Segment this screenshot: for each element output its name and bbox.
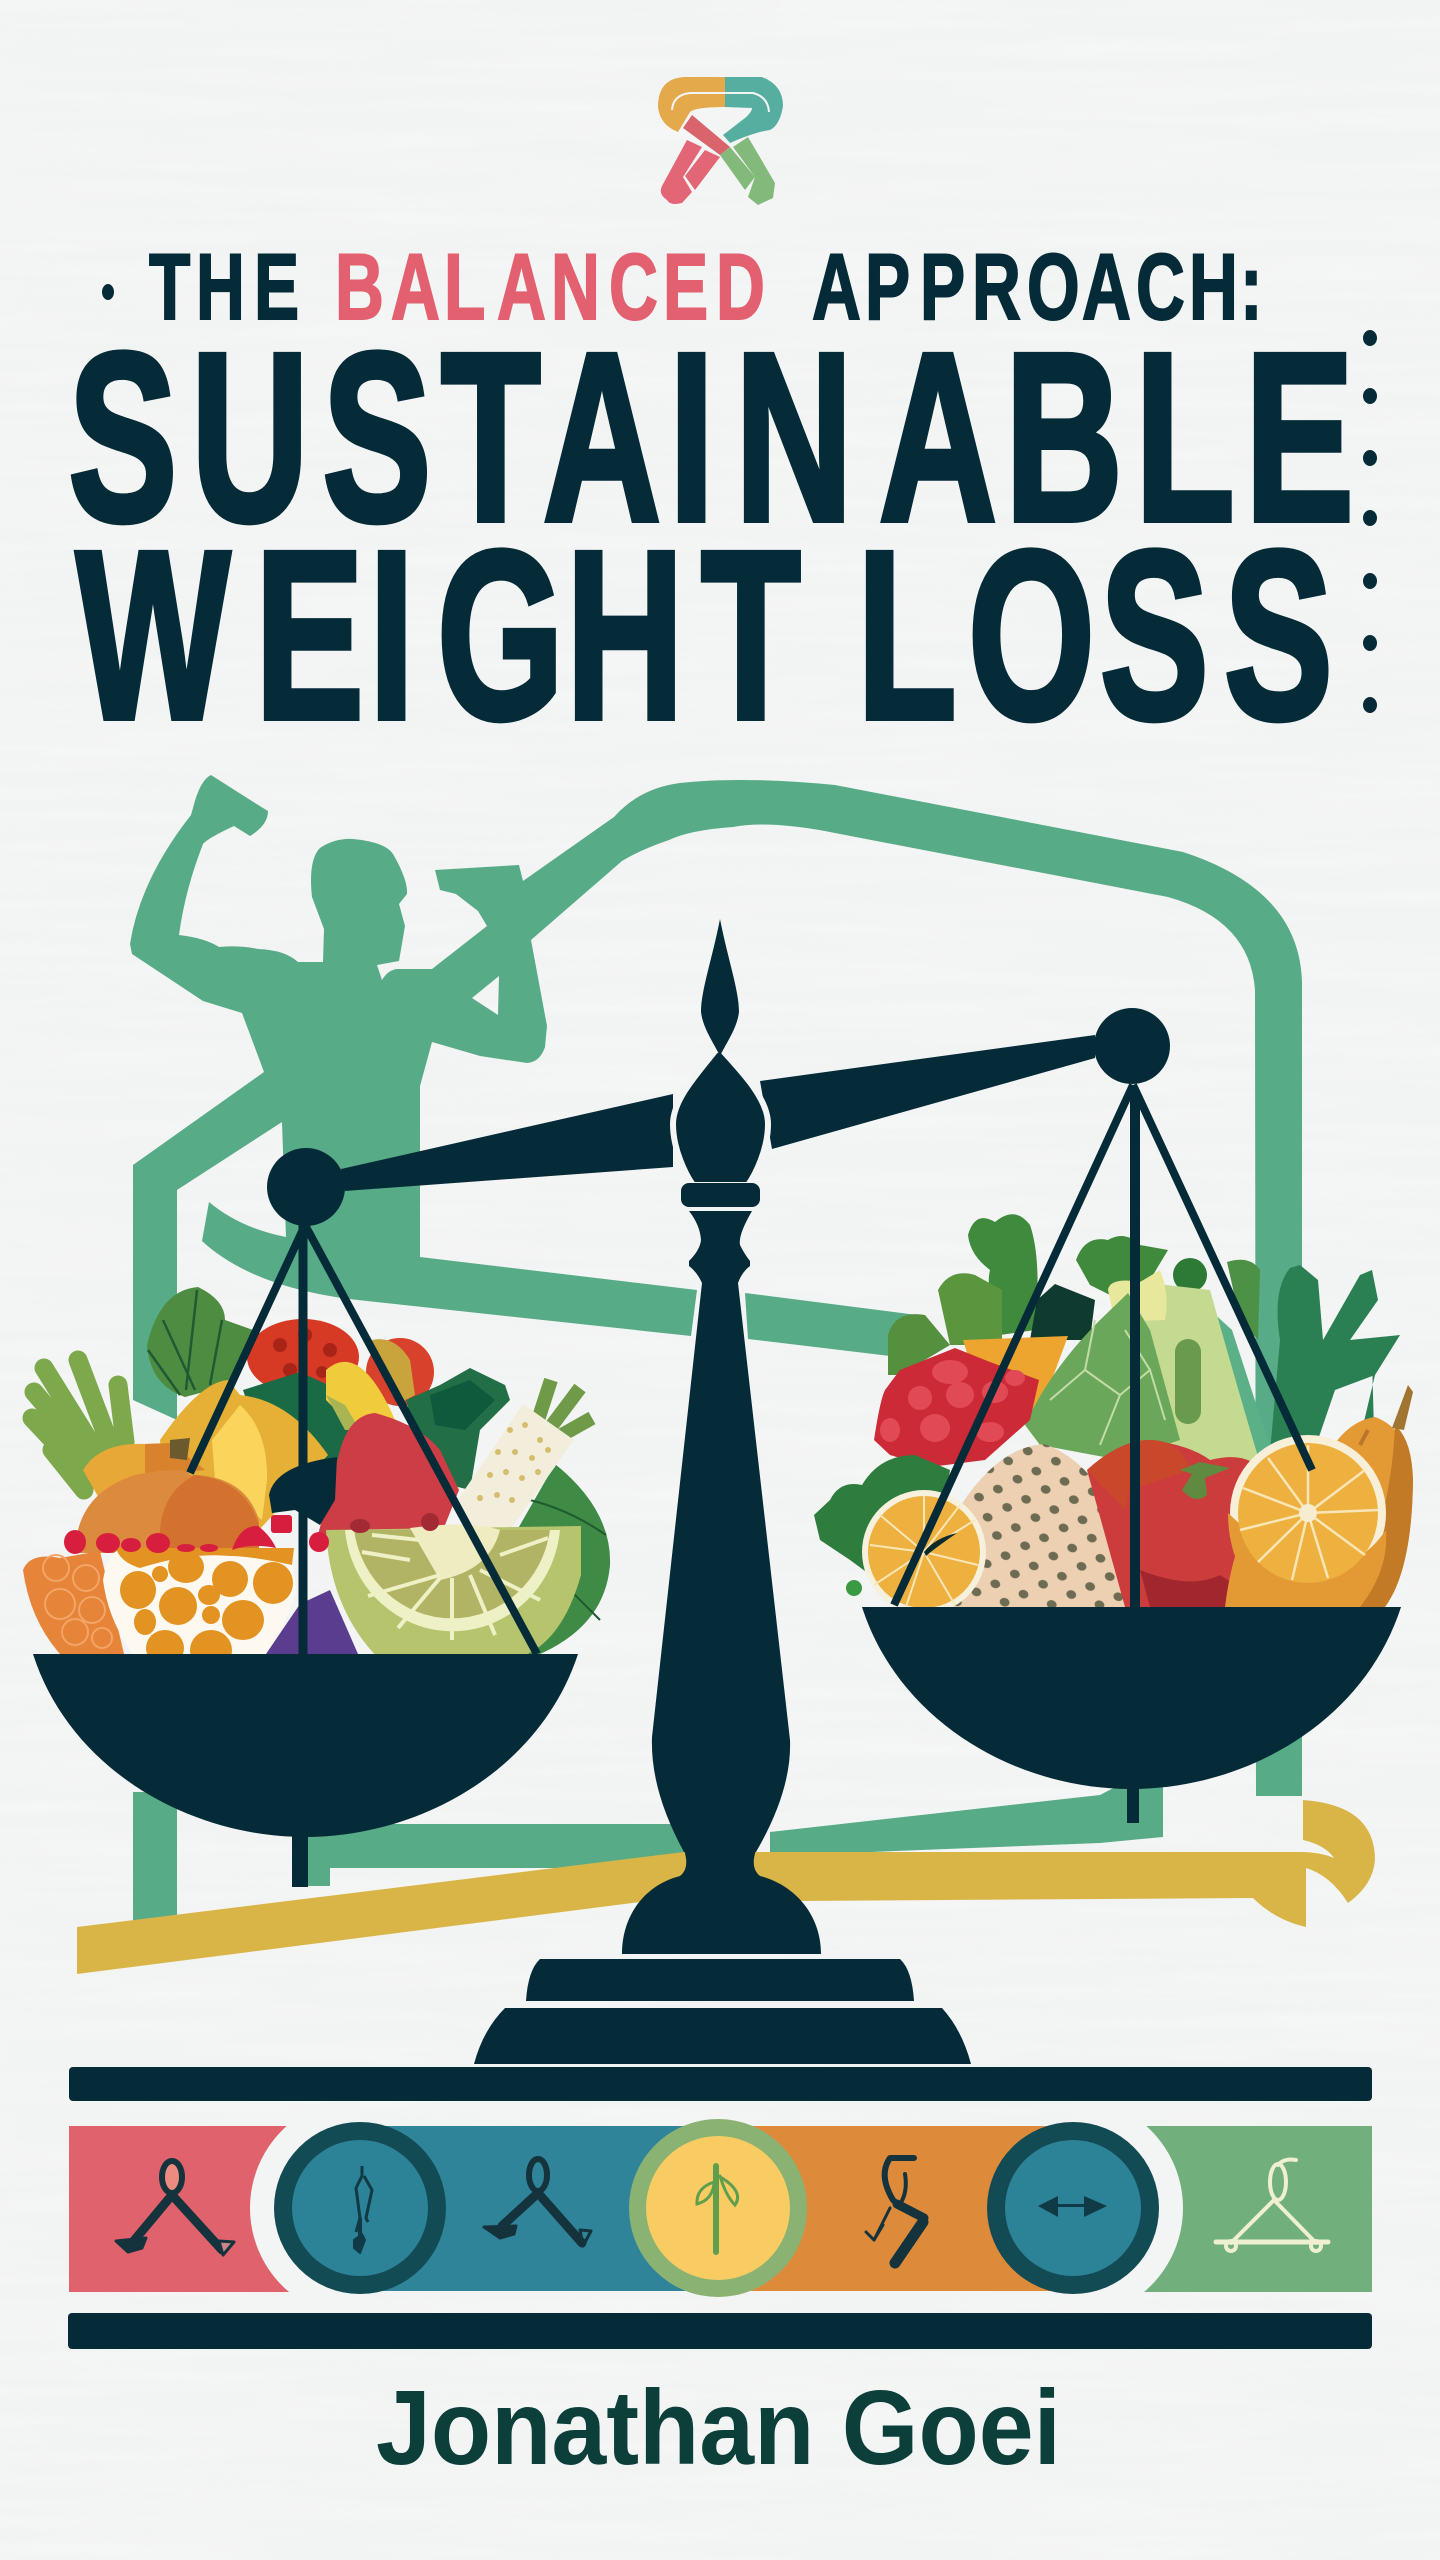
orange segmented fruit [23, 1551, 124, 1654]
dark aubergine [269, 1457, 337, 1525]
teal badge [274, 2122, 446, 2294]
scale: left pan [33, 1654, 578, 1837]
right dark leaves [1270, 1265, 1400, 1444]
pale squash [1108, 1270, 1258, 1461]
top dark bar [69, 2067, 1372, 2101]
white ring left [250, 2098, 470, 2318]
orange panel [745, 2126, 1055, 2291]
title: Sustainable: SUSTAINABLE [68, 304, 1354, 571]
left parsley [814, 1455, 950, 1596]
dark leaf [1030, 1284, 1095, 1340]
yellow pepper [160, 1380, 328, 1530]
icon: slim figure in teal badge [354, 2166, 372, 2253]
purple cabbage [266, 1590, 358, 1654]
pomegranate seeds [64, 1513, 439, 1554]
title line: The Balanced Approach: THE [149, 235, 319, 340]
icon: tweezer figure on teal [484, 2159, 591, 2246]
white corn [459, 1380, 592, 1535]
white and orange cell fruit [103, 1548, 296, 1654]
asparagus [32, 1360, 125, 1490]
icon band [69, 2098, 1372, 2318]
yellow badge [629, 2119, 807, 2297]
white ring right [963, 2098, 1183, 2318]
green cabbage [1025, 1293, 1180, 1460]
big orange slice [1228, 1435, 1386, 1607]
red berry cluster [247, 1319, 434, 1406]
outer green leaf [519, 1465, 610, 1654]
dark teal badge [987, 2122, 1159, 2294]
decorative title dots [102, 284, 1377, 713]
red panel [69, 2126, 299, 2292]
orange block [963, 1336, 1068, 1412]
right bowl food pile [814, 1214, 1413, 1614]
teal panel [380, 2126, 700, 2291]
yellow ground beam with hook [77, 1800, 1375, 1974]
lime slice [326, 1524, 581, 1660]
spotted melon [950, 1444, 1126, 1607]
title: Weight Loss: WEIGHT LOSS [76, 502, 1333, 769]
pear [1225, 1385, 1413, 1607]
big green leaf [147, 1287, 253, 1397]
icon: double arrow in dark teal badge [1038, 2196, 1107, 2217]
bottom dark bar [68, 2313, 1372, 2349]
icon: figure on orange [866, 2158, 924, 2263]
dark kale [406, 1368, 510, 1490]
dark green foliage [243, 1372, 348, 1464]
yellow fruit [326, 1362, 395, 1430]
author name: Jonathan Goei [376, 2369, 1061, 2487]
scale: left hanger [190, 1225, 537, 1887]
title line: The Balanced Approach: APPROACH: [770, 235, 1263, 340]
left bowl food pile [23, 1287, 610, 1670]
red pepper [318, 1413, 459, 1535]
icon: green sprout in yellow badge [697, 2166, 738, 2252]
icon: tweezer figure on red [116, 2161, 234, 2255]
title line: The Balanced Approach: BALANCED [335, 235, 765, 340]
logo: interlaced ribbon [658, 77, 783, 205]
raspberry [874, 1348, 1039, 1467]
back leafy greens [968, 1214, 1260, 1340]
scale: beam [267, 1008, 1170, 1226]
small orange slice [862, 1490, 986, 1614]
green athlete silhouette with house arch [130, 775, 1302, 1922]
icon: hanger figure on green [1216, 2160, 1328, 2251]
light green leaves [888, 1273, 1002, 1375]
title line: The Balanced Approach [149, 235, 1263, 340]
scale: right hanger [894, 1085, 1312, 1823]
scale: right pan [862, 1607, 1401, 1789]
green panel [1140, 2126, 1372, 2292]
orange gourd [78, 1438, 259, 1553]
red tomato [1087, 1440, 1250, 1607]
scale: central pillar [474, 919, 971, 2064]
